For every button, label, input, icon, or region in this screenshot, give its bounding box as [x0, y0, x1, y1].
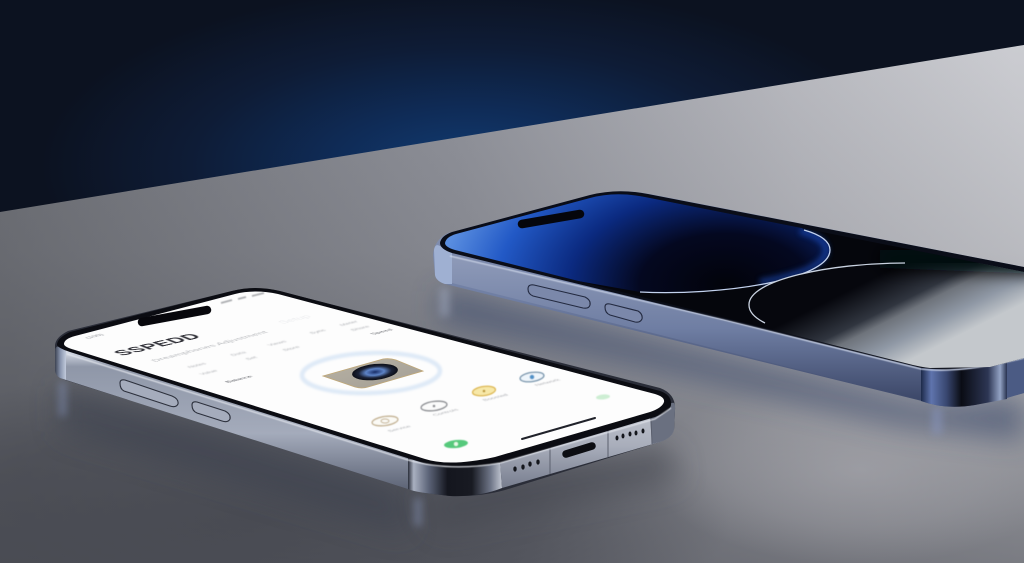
logo text: SSPEDD: [109, 332, 206, 357]
blue wallpaper area: [445, 194, 830, 292]
blue arc outline: [640, 230, 830, 293]
right phone black bezel: [440, 191, 1024, 369]
left phone button short: [192, 402, 230, 422]
reflections on table: [59, 288, 1024, 535]
left phone side band: [66, 350, 408, 489]
speaker holes right: [616, 428, 644, 440]
left phone bezel highlight: [67, 354, 671, 467]
left phone bottom dividers: [550, 417, 652, 474]
icon captions: [387, 378, 563, 433]
camera halo: [301, 351, 441, 395]
status text: (100): [84, 333, 106, 340]
left phone end corner: [650, 403, 675, 444]
icon: clock: [421, 400, 447, 412]
left phone camera pill: [142, 310, 207, 322]
left phone screen: [64, 292, 664, 462]
left phone: [50, 280, 680, 496]
right phone button long: [528, 285, 590, 308]
icon: green call: [444, 439, 468, 449]
dark label two: Speed: [369, 328, 395, 336]
camera plate: [323, 359, 423, 388]
small label group: Data: [230, 351, 249, 357]
dark label: Balance: [224, 375, 255, 384]
icon captions: Boosted: [482, 394, 510, 402]
right phone side band: [452, 257, 921, 400]
faint heading text: Setup: [277, 314, 315, 325]
subtitle text: Dreamphones Adjustment: [149, 330, 271, 363]
home indicator: [522, 418, 595, 439]
right phone end band: [1007, 357, 1024, 398]
grey top shadow: [899, 263, 1024, 286]
small label group: Set: [245, 356, 260, 361]
right phone camera pill: [522, 214, 580, 224]
right phone end cap: [434, 245, 452, 284]
right phone screen: [445, 194, 1024, 368]
grey wallpaper area: [764, 263, 1024, 368]
right phone corner: [921, 362, 1007, 407]
blue arc glow: [760, 231, 826, 282]
background wall: [0, 0, 1024, 230]
camera lens: [352, 364, 398, 380]
icon captions: Controls: [432, 409, 461, 417]
status icons: [221, 293, 264, 303]
icon captions: Network: [534, 378, 563, 387]
small label group: Meter: [339, 321, 360, 327]
right phone body: [433, 191, 1024, 407]
left phone black bezel: [57, 288, 671, 468]
small label group: Share: [350, 325, 373, 332]
small label group: Sync: [309, 329, 328, 335]
small label group: [187, 321, 373, 376]
right phone button short: [605, 304, 642, 322]
small label group: Views: [267, 340, 289, 347]
small label group: Notes: [187, 362, 209, 369]
left phone body: [55, 288, 675, 496]
charging port: [566, 446, 592, 454]
left phone end cap: [55, 347, 66, 380]
icon: faint green: [596, 394, 610, 400]
right phone bezel highlight: [450, 256, 1024, 370]
left phone corner: [408, 458, 502, 496]
speaker holes left: [513, 459, 540, 472]
right phone: [430, 185, 1024, 407]
left phone button long: [120, 380, 178, 407]
grey arc outline: [749, 263, 905, 323]
icon: shield: [372, 415, 398, 427]
small label group: Value: [199, 370, 220, 376]
icon: blue: [519, 371, 545, 383]
left phone bottom face: [500, 403, 674, 488]
icon: gold: [472, 385, 496, 397]
small label group: Store: [282, 346, 303, 352]
icon captions: Service: [387, 425, 414, 433]
